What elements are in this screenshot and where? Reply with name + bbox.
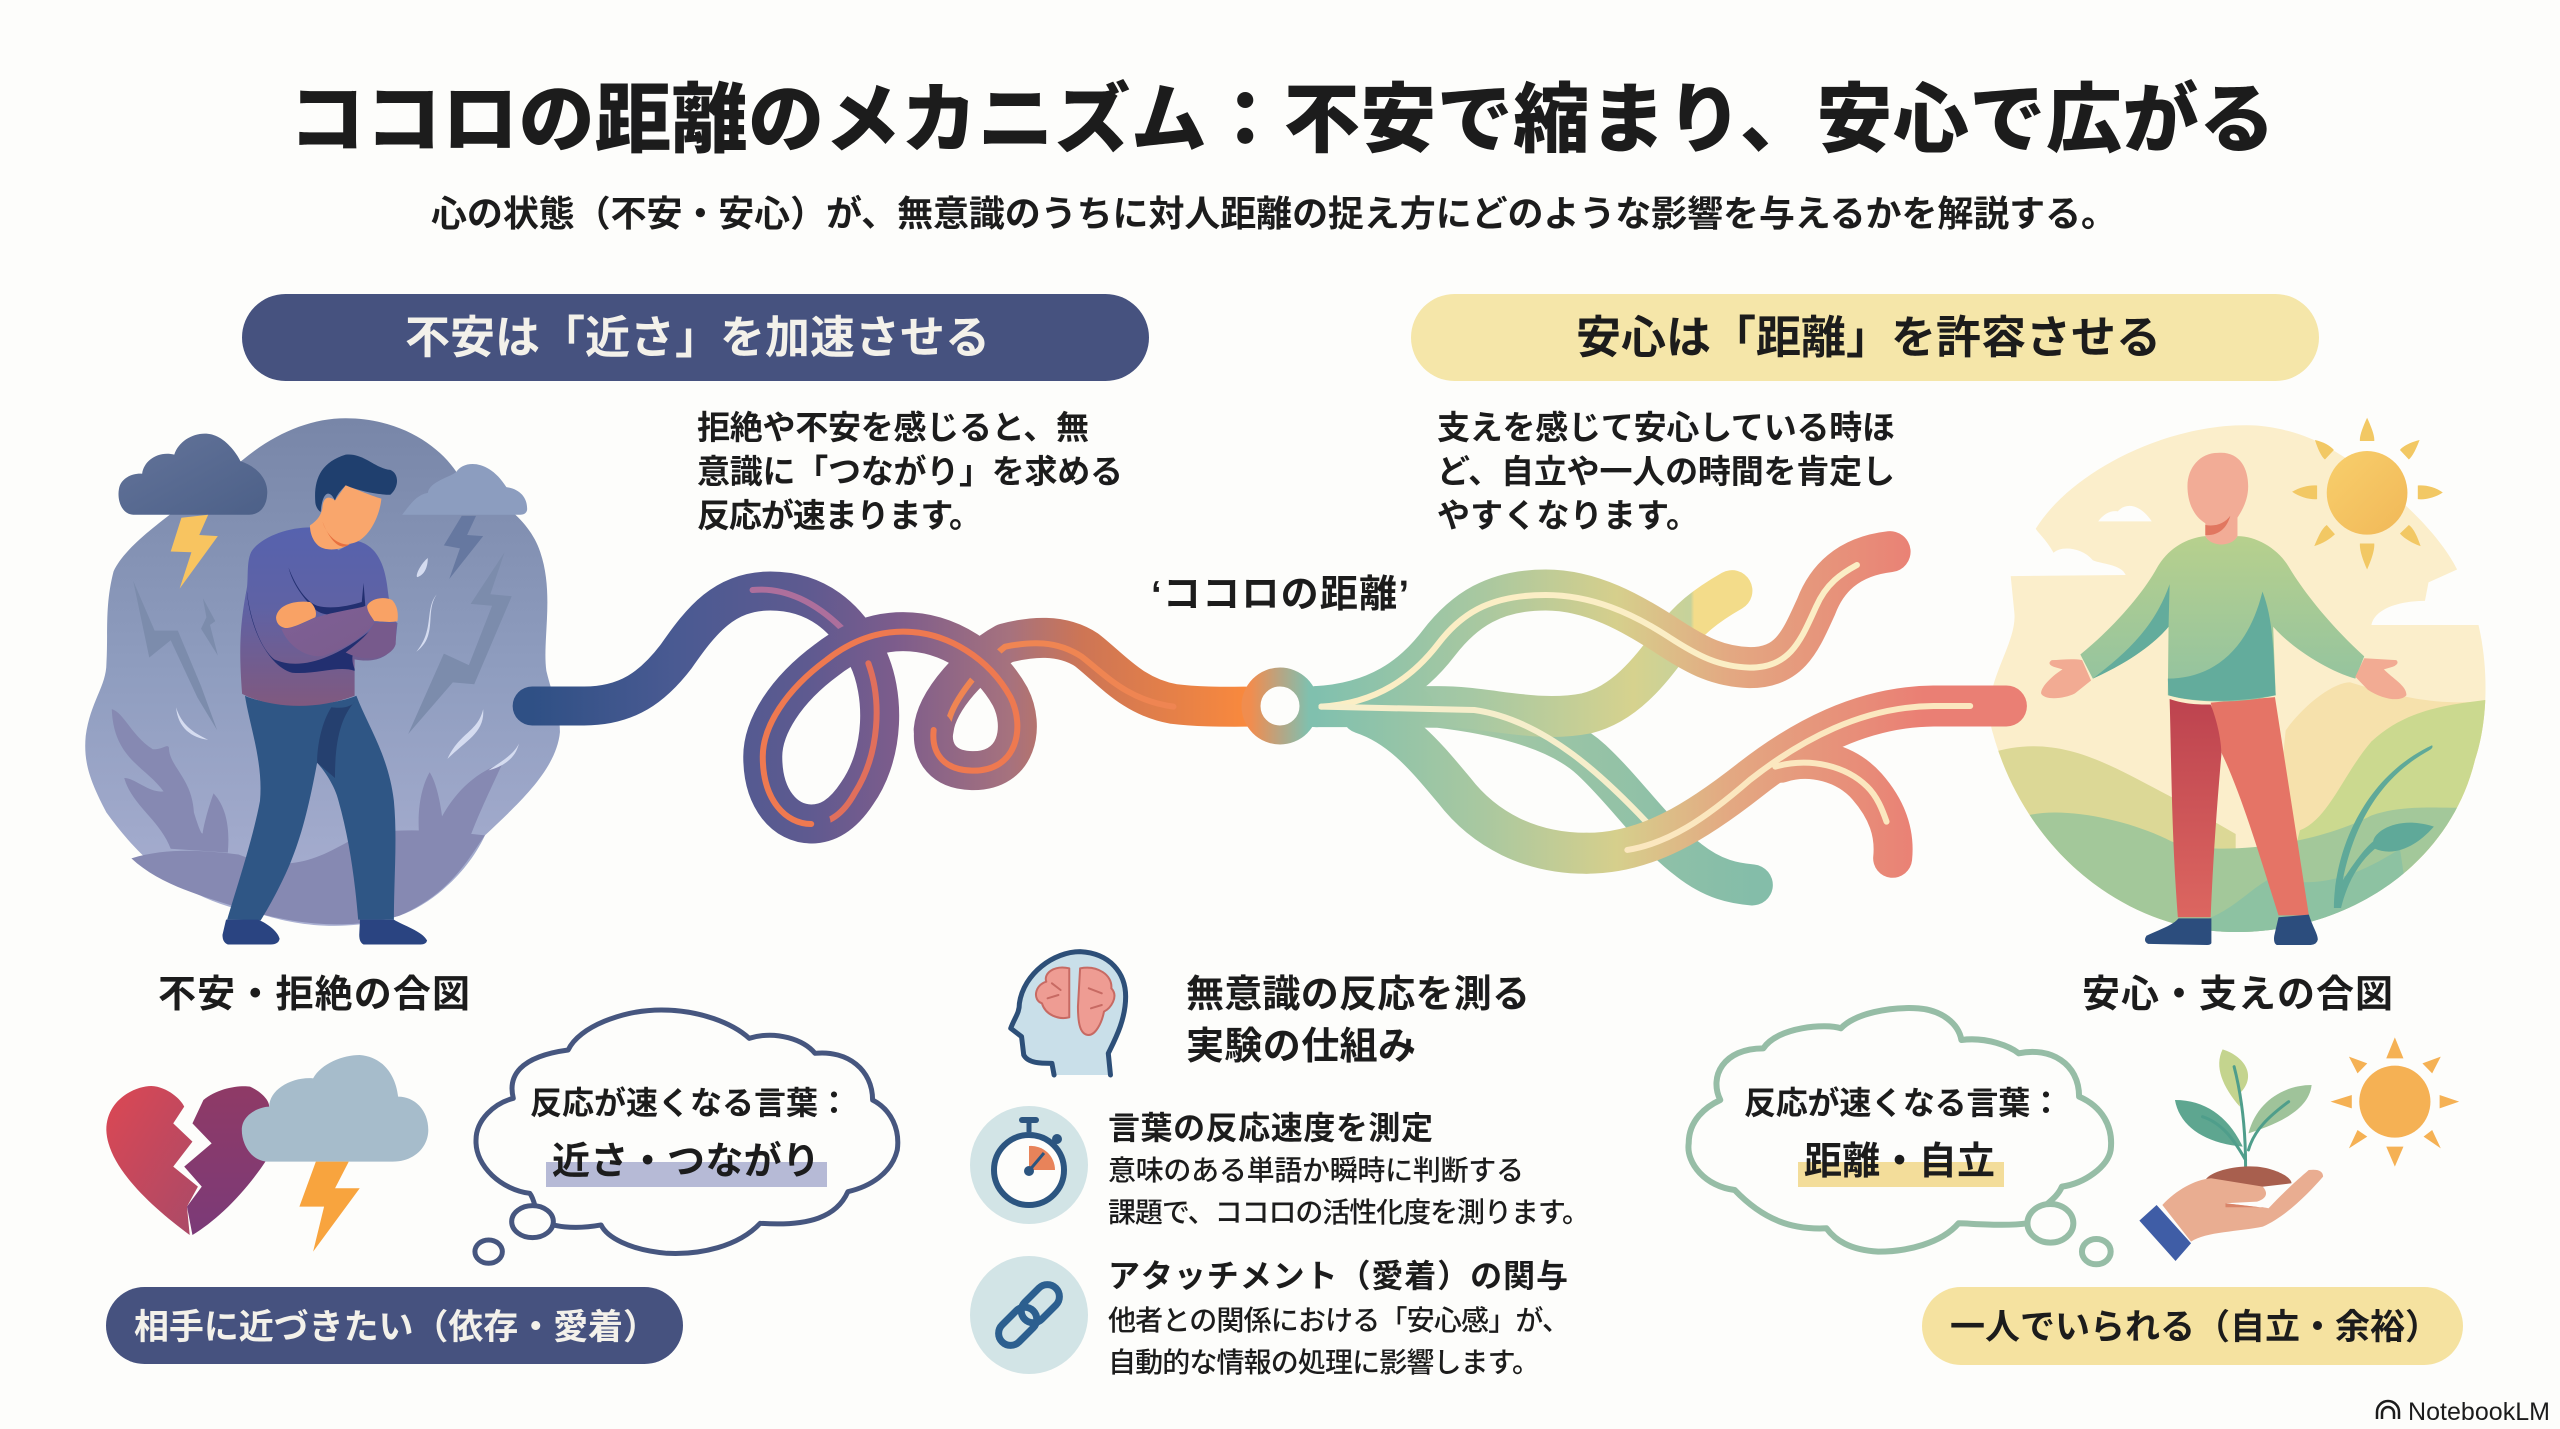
sun <box>2292 418 2443 569</box>
sweater <box>240 527 397 706</box>
reaction speed text <box>1108 1110 1590 1228</box>
attachment text: 自動的な情報の処理に影響します。 <box>1108 1347 1540 1378</box>
attachment text <box>1108 1258 1570 1378</box>
small cloud <box>2098 506 2152 521</box>
right explanation text: やすくなります。 <box>1437 497 1699 534</box>
branch to yellow stub <box>1362 591 1732 717</box>
right thought bubble: 反応が速くなる言葉： <box>1744 1085 2062 1121</box>
experiment heading: 実験の仕組み <box>1186 1026 1416 1068</box>
trousers <box>2211 697 2309 915</box>
left explanation text: 反応が速まります。 <box>697 497 982 534</box>
right explanation text: 支えを感じて安心している時ほ <box>1437 409 1895 446</box>
relaxed figure illustration <box>1991 418 2486 945</box>
sunny background <box>1991 425 2486 932</box>
sweater folds <box>246 568 372 673</box>
head and neck <box>2187 453 2248 544</box>
broken heart and storm icon <box>106 1055 428 1252</box>
lower red fork <box>1780 759 1893 858</box>
anxious figure illustration <box>85 418 560 944</box>
trousers <box>227 696 395 920</box>
reaction speed text: 課題で、ココロの活性化度を測ります。 <box>1108 1197 1590 1228</box>
branch to teal end <box>1362 707 1752 885</box>
shirt <box>2080 536 2364 702</box>
reaction speed text: 意味のある単語か瞬時に判断する <box>1108 1155 1524 1186</box>
hand with seedling and sun icon <box>2139 1037 2459 1261</box>
left figure caption: 不安・拒絶の合図 <box>158 974 470 1016</box>
shoes <box>222 920 427 944</box>
head <box>310 485 381 550</box>
right section header pill <box>1411 294 2319 381</box>
experiment heading: 無意識の反応を測る <box>1186 974 1530 1016</box>
subtitle: 心の状態（不安・安心）が、無意識のうちに対人距離の捉え方にどのような影響を与えるかを解説する。 <box>431 193 2117 234</box>
right figure caption: 安心・支えの合図 <box>2082 974 2393 1016</box>
plant leaf <box>2334 745 2434 908</box>
light storm cloud <box>402 464 527 515</box>
reaction speed text: 言葉の反応速度を測定 <box>1108 1110 1433 1146</box>
hands <box>2041 658 2406 699</box>
stopwatch icon <box>970 1106 1088 1224</box>
right conclusion pill: 一人でいられる（自立・余裕） <box>1950 1308 2440 1347</box>
hair <box>315 454 397 512</box>
upper branch to red end <box>1316 552 1890 707</box>
branching relaxed tubes <box>1316 552 2006 885</box>
left section header pill: 不安は「近さ」を加速させる <box>405 312 990 363</box>
attachment text: 他者との関係における「安心感」が、 <box>1108 1305 1570 1336</box>
left explanation text <box>697 409 1123 534</box>
crossed forearm <box>281 606 374 656</box>
hands <box>276 598 398 628</box>
left thought bubble <box>475 1010 898 1263</box>
brain head icon <box>1011 952 1126 1075</box>
twisted anxiety tube <box>532 590 1255 824</box>
NotebookLM watermark: NotebookLM <box>2408 1398 2550 1426</box>
left section header pill <box>242 294 1149 381</box>
trunk <box>1316 686 1413 727</box>
left thought bubble: 反応が速くなる言葉： <box>530 1085 850 1121</box>
first part of lower branch <box>1362 713 1587 853</box>
background lightning <box>133 552 512 734</box>
right explanation text <box>1437 409 1895 534</box>
experiment heading <box>1186 974 1530 1068</box>
shoes <box>2145 915 2318 945</box>
right thought bubble <box>1688 1008 2111 1264</box>
dark storm cloud <box>118 434 267 515</box>
central ring node <box>1251 677 1309 735</box>
right conclusion pill <box>1922 1287 2463 1365</box>
right section header pill: 安心は「距離」を許容させる <box>1576 312 2161 363</box>
left conclusion pill: 相手に近づきたい（依存・愛着） <box>134 1308 658 1347</box>
title: ココロの距離のメカニズム：不安で縮まり、安心で広がる <box>289 78 2275 163</box>
yellow lightning bolt <box>171 515 218 589</box>
center label: ‘ココロの距離’ <box>1151 574 1409 616</box>
background hill and plants <box>112 709 503 924</box>
chain link icon <box>970 1256 1088 1374</box>
left conclusion pill <box>106 1287 683 1364</box>
right thought bubble: 距離・自立 <box>1804 1141 1995 1183</box>
left explanation text: 拒絶や不安を感じると、無 <box>697 409 1089 446</box>
second part of lower branch to red end <box>1587 706 2006 853</box>
right explanation text: ど、自立や一人の時間を肯定し <box>1437 453 1895 490</box>
left explanation text: 意識に「つながり」を求める <box>697 453 1123 490</box>
attachment text: アタッチメント（愛着）の関与 <box>1108 1258 1568 1294</box>
left thought bubble: 近さ・つながり <box>552 1141 820 1183</box>
storm background blob <box>85 418 560 926</box>
